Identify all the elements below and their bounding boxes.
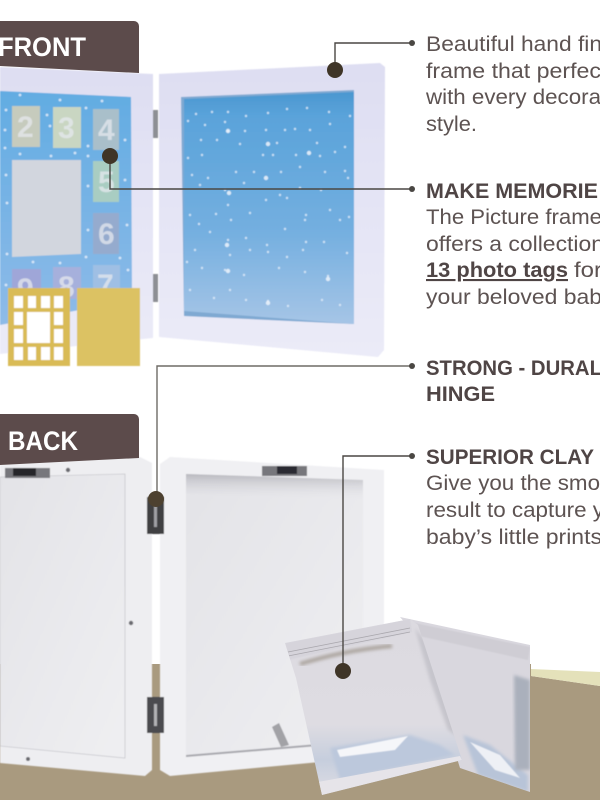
floor and wall backdrop — [0, 664, 600, 800]
photo slot 4 — [93, 109, 119, 150]
right back panel — [160, 457, 384, 776]
text block: hand finished frame: style. — [426, 113, 477, 136]
left frame panel — [0, 67, 153, 354]
photo slot 3: 3 — [58, 112, 75, 145]
callout line: hinge to durable hinge text — [148, 363, 415, 507]
gold cut-out mat — [8, 288, 70, 366]
photo slot 5 — [93, 161, 119, 202]
text block: make memories: your beloved bab — [426, 286, 600, 309]
text block: hand finished frame: frame that perfec — [426, 60, 600, 83]
right frame panel — [159, 63, 385, 357]
text block: hand finished frame: Beautiful hand fin — [426, 33, 600, 56]
photo slot 2 — [12, 106, 40, 147]
left pouch — [285, 619, 462, 795]
back screws — [26, 468, 289, 761]
text block: make memories: offers a collection — [426, 233, 600, 256]
photo slot 9: 9 — [17, 273, 34, 306]
text block: make memories: The Picture frame — [426, 206, 600, 229]
photo slot 6 — [93, 213, 119, 254]
back tab label — [0, 414, 139, 465]
photo slot 7: 7 — [97, 269, 114, 302]
photo: front open frame — [0, 63, 385, 366]
photo slot 9 — [12, 269, 41, 306]
back latches — [5, 466, 307, 478]
text block: make memories: 13 photo tags — [426, 259, 568, 282]
photo slot 8: 8 — [58, 271, 75, 304]
callout line: photo tags to memories text — [102, 148, 415, 192]
right pouch — [400, 617, 530, 792]
photo: back of frame — [0, 457, 384, 776]
text block: superior clay: result to capture y — [426, 499, 600, 522]
gold backing card — [77, 288, 140, 366]
callout line: frame to beautiful finish text — [327, 40, 415, 78]
front hinges — [153, 110, 158, 302]
photo slot 4: 4 — [98, 114, 115, 147]
text block: hand finished frame: with every decora — [425, 86, 600, 109]
photo slot 6: 6 — [98, 218, 115, 251]
text block: superior clay: baby’s little prints — [426, 526, 600, 549]
text block: make memories — [426, 180, 600, 309]
back tab label: BACK — [8, 426, 78, 456]
text block: make memories: MAKE MEMORIE — [426, 180, 598, 203]
callout line: pouch to clay text — [335, 453, 415, 679]
photo slot 8 — [53, 267, 81, 304]
front tab label — [0, 21, 139, 73]
foil clay pouches — [285, 617, 530, 795]
large photo window — [12, 160, 81, 257]
back hinges — [147, 497, 164, 733]
photo slot 7 — [93, 265, 120, 302]
photo slot 2: 2 — [17, 111, 34, 144]
text block: superior clay: Give you the smo — [426, 472, 600, 495]
text block: superior clay — [426, 446, 600, 549]
left back panel — [0, 457, 152, 776]
text block: superior clay: SUPERIOR CLAY — [426, 446, 594, 469]
text block: hand finished frame — [425, 33, 600, 136]
photo slot 5: 5 — [98, 166, 115, 199]
text block: durable hinge: HINGE — [426, 383, 495, 406]
text block: make memories: for — [574, 259, 600, 282]
photo slot 3 — [53, 107, 81, 148]
front tab label: FRONT — [0, 32, 86, 62]
text block: durable hinge — [426, 357, 600, 406]
